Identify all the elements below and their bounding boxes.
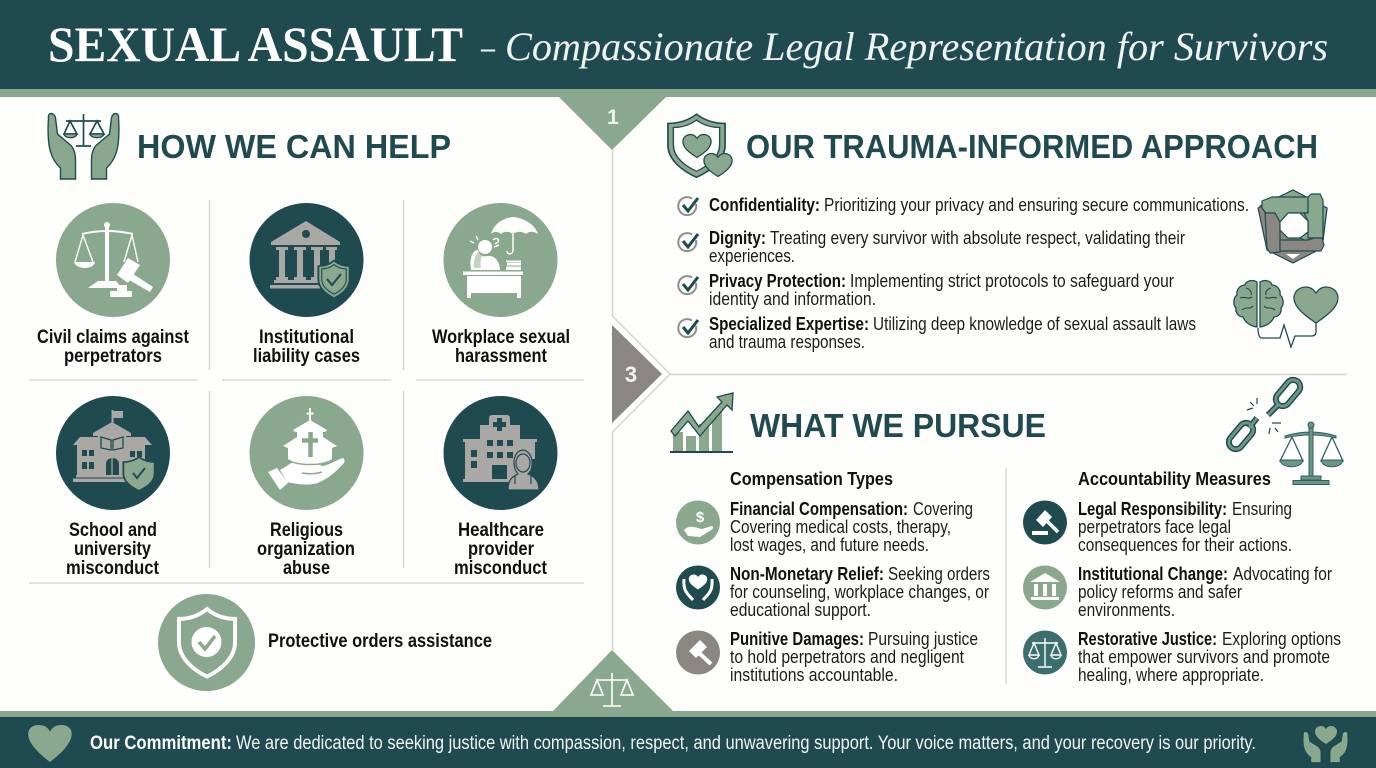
item: non-monetary relief: Non-Monetary Relief:	[730, 564, 884, 584]
label: provider	[468, 539, 535, 560]
commitment text: Our Commitment:	[90, 733, 232, 754]
item: restorative justice: Exploring options	[1222, 629, 1341, 649]
icon: hand holding church	[250, 396, 364, 510]
item: legal responsibility: Ensuring	[1232, 499, 1292, 519]
icon: heart	[28, 725, 72, 762]
item: non-monetary relief: educational support.	[730, 600, 871, 620]
label	[454, 520, 548, 579]
icon: gavel	[676, 630, 720, 674]
label: Workplace sexual	[432, 327, 570, 348]
icon: shield with check	[158, 594, 255, 691]
service: institutional liability	[250, 203, 364, 367]
item: specialized expertise: Utilizing deep knowledge of sexual assault laws	[873, 314, 1196, 334]
item: privacy protection	[678, 271, 1174, 309]
item: legal responsibility	[1023, 499, 1292, 555]
icon: linked hands	[1258, 190, 1327, 263]
item: institutional change: Advocating for	[1233, 564, 1332, 584]
section marker 1: 1	[607, 106, 619, 129]
service: civil claims	[37, 203, 190, 367]
item: privacy protection: Implementing strict protocols to safeguard your	[850, 271, 1174, 291]
icon: gavel	[1023, 500, 1067, 544]
heading: HOW WE CAN HELP	[137, 129, 451, 166]
label: abuse	[283, 558, 330, 579]
item: confidentiality	[678, 195, 1249, 215]
item: restorative justice: healing, where appropriate.	[1078, 665, 1264, 685]
item: dignity: Dignity:	[709, 228, 766, 248]
label: liability cases	[253, 346, 360, 367]
icon: courthouse with shield	[250, 203, 364, 317]
item: confidentiality: Confidentiality:	[709, 195, 820, 215]
icon: shield with hearts	[668, 114, 732, 177]
item: institutional change: Institutional Change:	[1078, 564, 1228, 584]
title	[48, 16, 1328, 72]
label	[257, 520, 355, 579]
icon: check	[678, 276, 698, 294]
icon: dollar in hand: $	[696, 509, 705, 526]
label: Healthcare	[458, 520, 544, 541]
icon: growth chart	[670, 393, 733, 453]
column divider	[1005, 468, 1007, 684]
icon: hospital and doctor	[444, 396, 558, 510]
service: protective orders	[158, 594, 492, 691]
heading: WHAT WE PURSUE	[750, 408, 1046, 445]
item: financial compensation: Covering medical costs, therapy,	[730, 517, 951, 537]
label	[37, 327, 190, 367]
title: –	[480, 24, 496, 69]
subheading: Compensation Types	[730, 468, 893, 489]
item: dignity: experiences.	[709, 246, 795, 266]
item: legal responsibility: perpetrators face legal	[1078, 517, 1231, 537]
icon: check	[678, 233, 698, 251]
item: financial compensation	[676, 499, 973, 555]
item: non-monetary relief: Seeking orders	[888, 564, 990, 584]
label: organization	[257, 539, 355, 560]
footer banner	[0, 711, 1376, 768]
label: misconduct	[66, 558, 160, 579]
item: restorative justice: that empower survivors and promote	[1078, 647, 1330, 667]
panel: how we can help	[29, 114, 584, 691]
item: dignity	[678, 228, 1185, 266]
panel: trauma-informed approach	[668, 114, 1338, 352]
item: privacy protection: Privacy Protection:	[709, 271, 846, 291]
grid dividers	[29, 200, 584, 583]
panel: what we pursue	[670, 377, 1343, 685]
label: Institutional	[259, 327, 354, 348]
item: non-monetary relief: for counseling, workplace changes, or	[730, 582, 989, 602]
item: punitive damages: Pursuing justice	[868, 629, 978, 649]
service: school and university	[56, 396, 170, 579]
label: misconduct	[454, 558, 548, 579]
item: non-monetary relief	[676, 564, 990, 620]
service: workplace harassment	[432, 203, 570, 367]
item: institutional change: policy reforms and safer	[1078, 582, 1242, 602]
section marker 1	[559, 97, 666, 150]
item: punitive damages	[676, 629, 978, 685]
item: punitive damages: to hold perpetrators and negligent	[730, 647, 964, 667]
icon: scales and gavel	[56, 203, 170, 317]
title: SEXUAL ASSAULT	[48, 16, 463, 72]
icon: person at desk under umbrella	[444, 203, 558, 317]
icon: dollar in hand	[676, 500, 720, 544]
icon: school with shield	[56, 396, 170, 510]
section marker: scales	[553, 650, 673, 711]
item: privacy protection: identity and information.	[709, 289, 876, 309]
icon: hands and heart	[1304, 726, 1347, 762]
section connector lines	[612, 150, 1347, 650]
icon: check	[678, 319, 698, 337]
header banner	[0, 0, 1376, 97]
item: specialized expertise	[678, 314, 1196, 352]
label	[432, 327, 570, 367]
label: perpetrators	[64, 346, 162, 367]
subheading: Accountability Measures	[1078, 468, 1271, 489]
item: institutional change	[1023, 564, 1332, 620]
service: religious organization	[250, 396, 364, 579]
label	[253, 327, 360, 367]
icon: hands and heart	[676, 566, 720, 610]
item: financial compensation: Financial Compensation:	[730, 499, 908, 519]
heading: OUR TRAUMA-INFORMED APPROACH	[746, 129, 1318, 166]
label: Religious	[270, 520, 343, 541]
label: university	[74, 539, 151, 560]
item: financial compensation: lost wages, and future needs.	[730, 535, 929, 555]
item: punitive damages: Punitive Damages:	[730, 629, 864, 649]
section marker 3	[612, 325, 662, 423]
label: School and	[69, 520, 157, 541]
icon: check	[678, 197, 698, 215]
title: Compassionate Legal Representation for Survivors	[505, 24, 1328, 69]
icon: broken chain and scales	[1226, 377, 1343, 484]
label: harassment	[455, 346, 548, 367]
item: restorative justice	[1023, 629, 1341, 685]
icon: scales	[1023, 630, 1067, 674]
label	[66, 520, 160, 579]
item: institutional change: environments.	[1078, 600, 1175, 620]
label: Protective orders assistance	[268, 631, 492, 652]
item: punitive damages: institutions accountable.	[730, 665, 898, 685]
icon: courthouse	[1023, 566, 1067, 610]
item: financial compensation: Covering	[913, 499, 973, 519]
icon: brain and heart	[1234, 281, 1338, 347]
item: specialized expertise: and trauma responses.	[709, 332, 865, 352]
column: accountability measures	[1023, 468, 1341, 685]
label: Civil claims against	[37, 327, 190, 348]
icon: hands holding scales	[48, 114, 119, 179]
column: compensation types	[676, 468, 990, 685]
item: restorative justice: Restorative Justice:	[1078, 629, 1217, 649]
service: healthcare provider	[444, 396, 558, 579]
item: confidentiality: Prioritizing your privacy and ensuring secure communications.	[824, 195, 1249, 215]
item: specialized expertise: Specialized Expertise:	[709, 314, 869, 334]
item: legal responsibility: consequences for their actions.	[1078, 535, 1292, 555]
item: dignity: Treating every survivor with absolute respect, validating their	[770, 228, 1185, 248]
section marker 3: 3	[625, 362, 637, 387]
item: legal responsibility: Legal Responsibility:	[1078, 499, 1227, 519]
